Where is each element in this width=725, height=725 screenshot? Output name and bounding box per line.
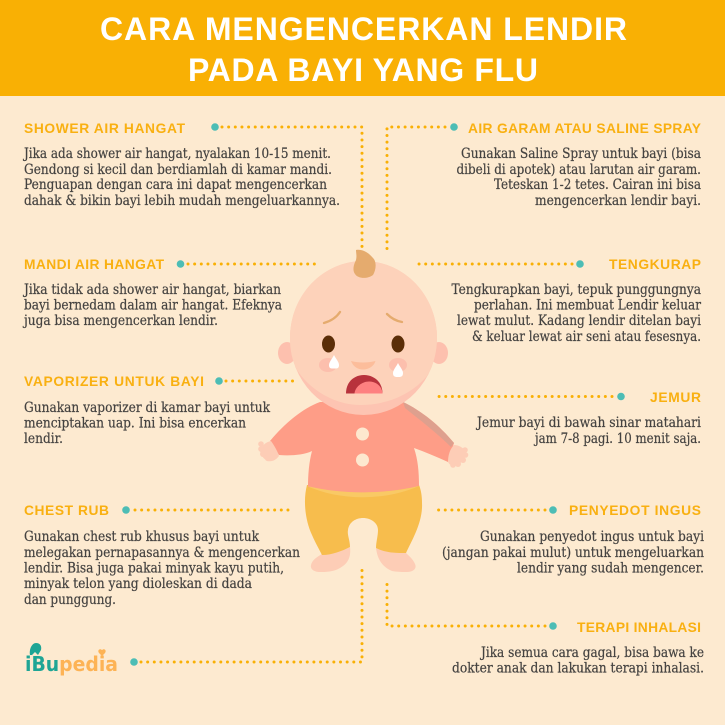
panel: tengkurap: TENGKURAP — [609, 257, 701, 272]
panel: mandi air hangat: Jika tidak ada shower air hangat, biarkan — [22, 282, 281, 298]
panel: penyedot ingus: PENYEDOT INGUS — [569, 503, 701, 518]
panel: jemur: jam 7-8 pagi. 10 menit saja. — [533, 431, 701, 447]
baby pants — [305, 485, 422, 555]
panel: vaporizer untuk bayi: lendir. — [24, 431, 63, 447]
panel: penyedot ingus: lendir yang sudah mengencer. — [517, 560, 704, 576]
panel: air garam atau saline spray — [456, 121, 701, 209]
panel: shower air hangat: dahak & bikin bayi lebih mudah mengeluarkannya. — [24, 193, 340, 209]
cheeks — [319, 358, 337, 372]
shirt buttons — [356, 428, 369, 440]
title banner: PADA BAYI YANG FLU — [188, 52, 538, 88]
panel: shower air hangat — [22, 121, 340, 209]
panel: vaporizer untuk bayi: menciptakan uap. Ini bisa encerkan — [24, 416, 246, 432]
baby ears — [278, 342, 296, 364]
panel: chest rub: CHEST RUB — [24, 503, 109, 518]
panel: shower air hangat: Jika ada shower air hangat, nyalakan 10-15 menit. — [22, 146, 331, 162]
panel: jemur — [475, 390, 702, 447]
panel: chest rub: melegakan pernapasannya & mengencerkan — [24, 545, 300, 561]
panel: tengkurap — [452, 257, 702, 345]
title banner — [0, 0, 725, 96]
panel: chest rub: lendir. Bisa juga pakai minyak kayu putih, — [24, 560, 284, 576]
panel: penyedot ingus — [442, 503, 705, 576]
panel: mandi air hangat: bayi bernedam dalam air hangat. Efeknya — [24, 298, 282, 314]
crying mouth — [346, 375, 382, 394]
panel: shower air hangat: Penguapan dengan cara ini dapat mengencerkan — [24, 177, 327, 193]
panel: jemur: Jemur bayi di bawah sinar matahari — [475, 415, 702, 431]
panel: mandi air hangat — [22, 257, 282, 329]
panel: mandi air hangat: juga bisa mengencerkan lendir. — [22, 313, 218, 329]
eyebrows — [324, 312, 402, 323]
panel: terapi inhalasi — [452, 620, 704, 676]
baby right foot — [376, 548, 416, 572]
panel: chest rub: Gunakan chest rub khusus bayi untuk — [24, 529, 260, 545]
title banner: CARA MENGENCERKAN LENDIR — [100, 11, 627, 47]
left hand — [258, 441, 279, 461]
panel: air garam atau saline spray: mengencerkan lendir bayi. — [535, 193, 701, 209]
illustration: crying baby — [258, 250, 468, 572]
baby shirt — [270, 402, 454, 493]
panel: penyedot ingus: Gunakan penyedot ingus untuk bayi — [480, 529, 705, 545]
dotted connector lines — [135, 127, 612, 662]
hair curl — [353, 250, 376, 278]
tongue — [354, 382, 382, 394]
right hand — [448, 445, 468, 468]
panel: jemur: JEMUR — [650, 390, 701, 405]
panel: terapi inhalasi: TERAPI INHALASI — [577, 620, 701, 635]
panel: shower air hangat: Gendong si kecil dan berdiamlah di kamar mandi. — [24, 162, 332, 178]
panel: air garam atau saline spray: AIR GARAM ATAU SALINE SPRAY — [468, 121, 701, 136]
baby head — [290, 261, 437, 415]
panel: vaporizer untuk bayi: Gunakan vaporizer di kamar bayi untuk — [24, 400, 271, 416]
panel: mandi air hangat: MANDI AIR HANGAT — [24, 257, 165, 272]
panel: chest rub — [24, 503, 300, 608]
eyes — [322, 336, 335, 352]
panel: vaporizer untuk bayi: VAPORIZER UNTUK BAYI — [24, 374, 204, 389]
panel: chest rub: minyak telon yang dioleskan di dada — [24, 576, 252, 592]
baby left foot — [311, 547, 350, 572]
panel: chest rub: dan punggung. — [24, 592, 116, 608]
tears — [329, 355, 339, 369]
panel: vaporizer untuk bayi — [24, 374, 271, 447]
shoulder shade — [403, 402, 454, 447]
teal connector dots — [122, 123, 625, 666]
waistband highlight on pants — [307, 486, 419, 497]
logo: iBupedia: iBupedia — [25, 652, 118, 676]
panel: shower air hangat: SHOWER AIR HANGAT — [24, 121, 186, 136]
nose — [351, 361, 376, 370]
